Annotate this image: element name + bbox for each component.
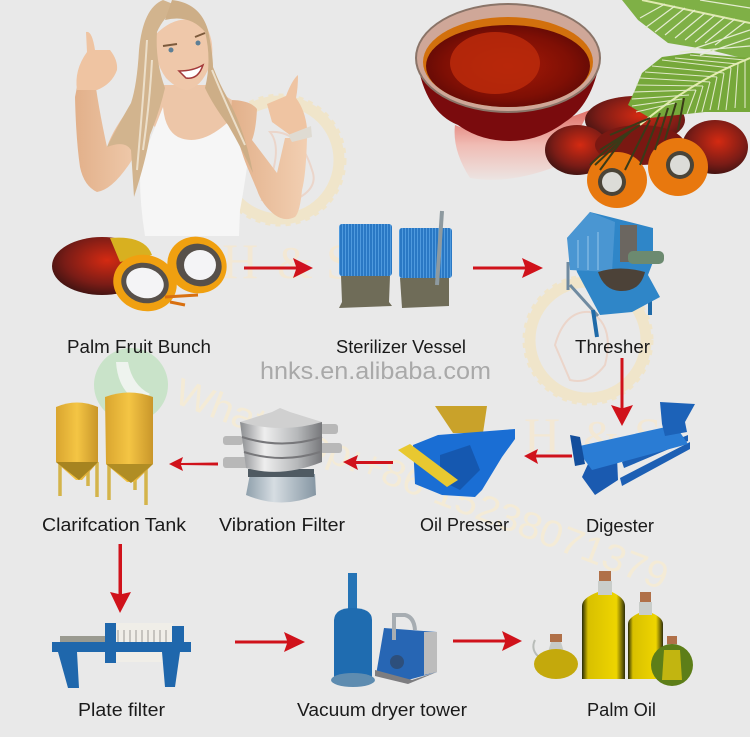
watermark: gear logos xyxy=(216,96,651,403)
watermark: H & S xyxy=(222,233,662,463)
icon: oil presser xyxy=(398,406,515,497)
icon: sterilizer vessels xyxy=(339,211,452,308)
watermark: H & S: S xyxy=(634,407,662,463)
face xyxy=(155,19,212,90)
hair locks xyxy=(107,0,178,197)
photo: bowl of red palm oil xyxy=(416,4,600,180)
labels: Vibration Filter xyxy=(219,515,345,535)
watermark: H & S: H xyxy=(524,407,560,463)
watch xyxy=(288,126,312,142)
watermark: site address: hnks.en.alibaba.com xyxy=(260,358,491,385)
icon: digester screw xyxy=(570,402,695,495)
arrow: sterilizer to thresher xyxy=(473,258,543,278)
icon: palm oil bottles xyxy=(533,571,693,686)
watermark: whatsapp icon xyxy=(94,348,168,422)
watermark: H & S: & xyxy=(277,237,313,288)
icon: thresher machine xyxy=(567,212,664,337)
labels: Digester xyxy=(586,516,654,536)
icon: clarification tanks xyxy=(56,392,153,505)
labels: Thresher xyxy=(575,337,650,357)
photo: palm fruits, top right xyxy=(545,96,748,208)
labels: Oil Presser xyxy=(420,515,509,535)
right hand xyxy=(267,75,307,135)
labels: Palm Fruit Bunch xyxy=(67,337,211,357)
chest xyxy=(150,85,232,142)
tank top xyxy=(140,103,247,236)
icon: vibration filter xyxy=(223,408,342,502)
labels xyxy=(42,337,656,720)
arrow: thresher to digester xyxy=(611,358,633,426)
arrow: tank to plate filter xyxy=(110,544,131,613)
icon: palm fruit bunch xyxy=(52,227,236,318)
arrow: digester to presser xyxy=(524,449,572,464)
labels: Sterilizer Vessel xyxy=(336,337,466,357)
icon: vacuum dryer tower xyxy=(331,573,437,687)
labels: Clarifcation Tank xyxy=(42,515,187,535)
watermark: H & S: H xyxy=(222,233,258,289)
watermark: H & S: S xyxy=(326,233,354,289)
arrow: dryer to palm oil xyxy=(453,631,522,651)
arrow: presser to vibration filter xyxy=(343,455,393,470)
labels: Vacuum dryer tower xyxy=(297,700,467,720)
photo: palm fronds xyxy=(590,0,750,170)
photo: smiling woman with thumbs up xyxy=(75,0,312,236)
icon: plate filter press xyxy=(52,623,191,688)
watermark: H & S: & xyxy=(583,411,619,462)
arrow: plate filter to dryer xyxy=(235,632,305,652)
arrow: bunch to sterilizer xyxy=(244,258,313,278)
watermark: whatsapp number: WhatsApp:+86 15238071379 xyxy=(169,371,674,599)
labels: Palm Oil xyxy=(587,700,656,720)
left arm xyxy=(75,87,150,192)
labels: Plate filter xyxy=(78,700,165,720)
left hand xyxy=(76,32,117,90)
arrow: filter to tank xyxy=(169,457,218,471)
right arm xyxy=(230,100,307,219)
